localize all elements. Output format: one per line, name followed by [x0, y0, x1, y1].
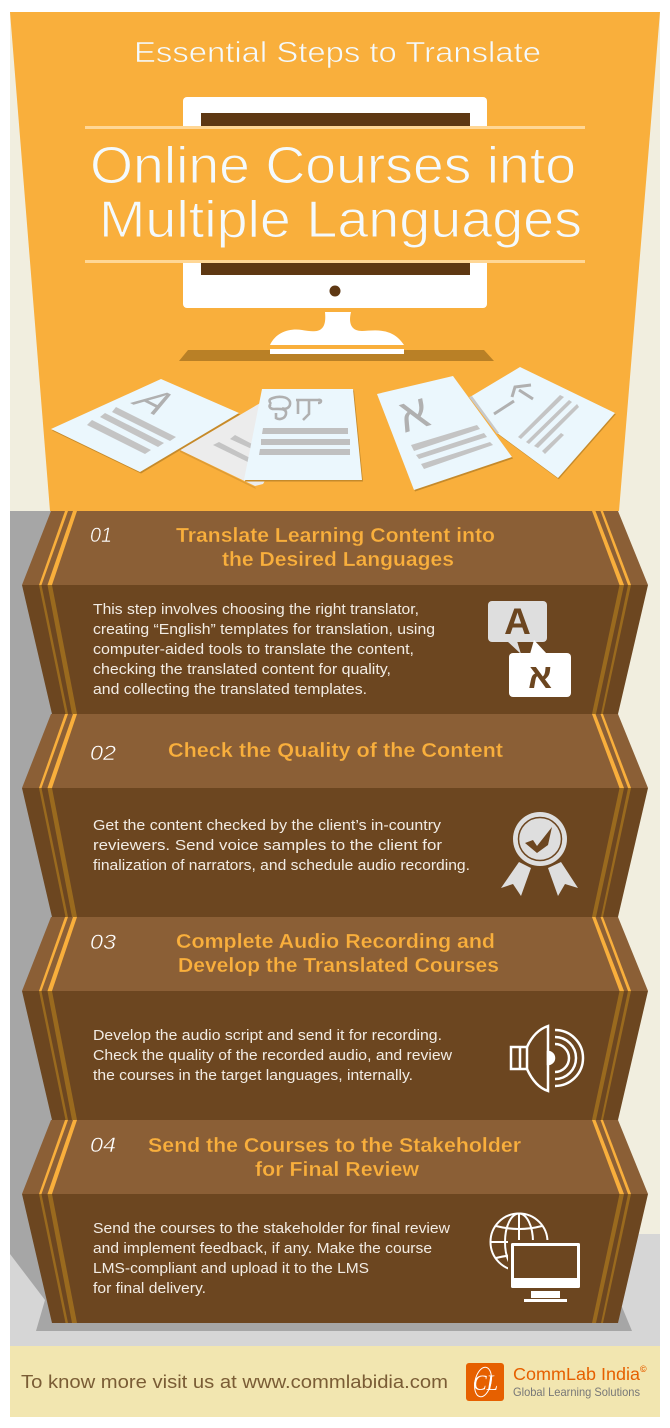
step 1 text: computer-aided tools to translate the content, — [93, 641, 414, 658]
step 4 text: LMS-compliant and upload it to the LMS — [93, 1260, 369, 1277]
illustration: translated papers — [51, 367, 616, 492]
logo: CommLab India: Global Learning Solutions — [513, 1385, 640, 1399]
paper: latin A — [51, 379, 240, 474]
step 4 text — [93, 1220, 450, 1297]
title line one: Online Courses into — [90, 137, 576, 195]
icon: translation bubbles: א — [528, 657, 552, 696]
paper: latin A: A — [121, 383, 189, 420]
step 3 heading — [176, 931, 499, 977]
step 1 heading — [176, 525, 495, 571]
step 1 text: checking the translated content for quality, — [93, 661, 391, 678]
title band — [85, 126, 585, 263]
paper: hebrew aleph — [377, 376, 513, 492]
paper: grey back sheet — [180, 402, 290, 489]
step 1 heading: Translate Learning Content into — [176, 525, 495, 547]
title line two: Multiple Languages — [99, 191, 582, 249]
footer bar — [10, 1346, 660, 1417]
step 4 panel — [22, 1120, 648, 1323]
icon: translation bubbles — [488, 601, 571, 697]
step 2 text: reviewers. Send voice samples to the client for — [93, 837, 442, 854]
paper: tamil glyph — [244, 389, 363, 482]
step 4 text: and implement feedback, if any. Make the course — [93, 1240, 432, 1257]
step 1 text — [93, 601, 435, 698]
step 1 text: and collecting the translated templates. — [93, 681, 367, 698]
step number 02: 02 — [90, 742, 116, 765]
logo: CommLab India: CommLab India — [513, 1364, 640, 1384]
logo: CommLab India: © — [640, 1364, 647, 1374]
step 1 text: This step involves choosing the right translator, — [93, 601, 419, 618]
step 3 panel — [22, 917, 648, 1120]
step 4 heading — [148, 1135, 521, 1181]
icon: desktop monitor — [179, 97, 494, 361]
step 3 text: Check the quality of the recorded audio, and review — [93, 1047, 452, 1064]
step 1 panel — [22, 511, 648, 714]
step 4 heading: Send the Courses to the Stakeholder — [148, 1135, 521, 1157]
icon: translation bubbles: A — [504, 601, 531, 642]
heading: essential steps: Essential Steps to Translate — [134, 37, 541, 69]
step 4 text: for final delivery. — [93, 1280, 206, 1297]
step 3 text: the courses in the target languages, internally. — [93, 1067, 413, 1084]
step 3 text — [93, 1027, 452, 1084]
step 3 heading: Complete Audio Recording and — [176, 931, 495, 953]
paper: hebrew aleph: א — [392, 383, 435, 443]
step 2 text — [93, 817, 470, 874]
step number 03: 03 — [90, 931, 116, 954]
header panel — [10, 12, 660, 511]
footer call to action: To know more visit us at www.commlabidia.com — [21, 1371, 448, 1392]
step 2 text: Get the content checked by the client’s in-country — [93, 817, 442, 834]
step 1 heading: the Desired Languages — [222, 549, 454, 571]
logo: CommLab India: CL — [473, 1370, 498, 1395]
icon: speaker — [511, 1026, 583, 1091]
step number 04: 04 — [90, 1134, 116, 1157]
step 2 panel — [22, 714, 648, 917]
icon: globe and monitor — [490, 1213, 583, 1302]
step 3 text: Develop the audio script and send it for recording. — [93, 1027, 442, 1044]
paper: right glyph sheet — [469, 367, 616, 479]
step 4 heading: for Final Review — [255, 1159, 419, 1181]
step 2 heading: Check the Quality of the Content — [168, 740, 503, 762]
step 1 text: creating “English” templates for translation, using — [93, 621, 435, 638]
step number 01: 01 — [90, 524, 112, 547]
logo: CommLab India — [466, 1363, 647, 1401]
step 3 heading: Develop the Translated Courses — [178, 955, 499, 977]
step 2 text: finalization of narrators, and schedule audio recording. — [93, 857, 470, 874]
icon: award ribbon — [501, 812, 578, 896]
step 4 text: Send the courses to the stakeholder for final review — [93, 1220, 450, 1237]
